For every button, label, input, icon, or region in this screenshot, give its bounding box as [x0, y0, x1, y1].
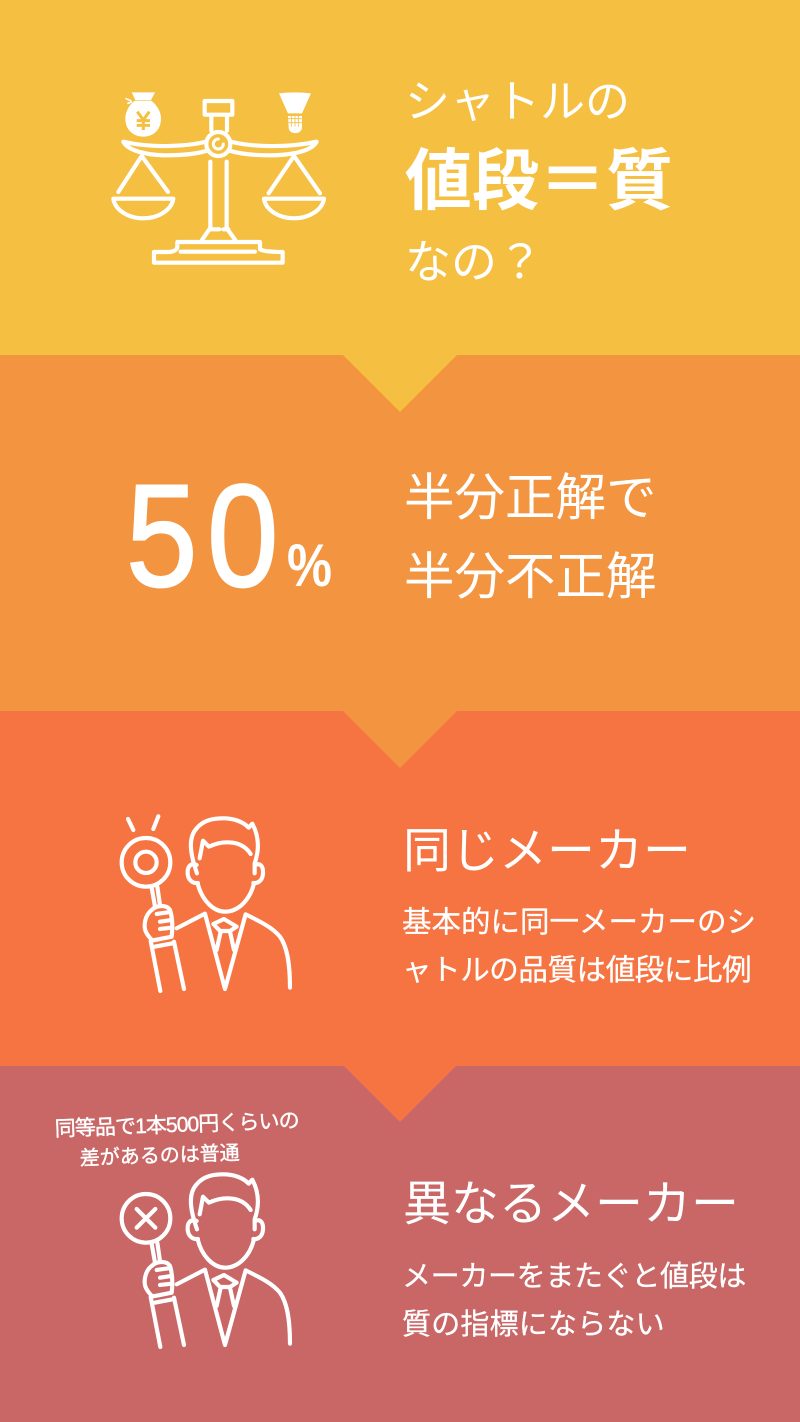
handwritten note: 差があるのは普通	[79, 1141, 240, 1170]
heading: シャトルの: シャトルの	[405, 76, 630, 127]
big number: 50%: 0	[207, 455, 278, 618]
big number: 50%: %	[287, 532, 332, 599]
big number: 50%: 5	[126, 455, 197, 618]
text: メーカーをまたぐと値段は: メーカーをまたぐと値段は	[402, 1261, 746, 1293]
panel: fifty percent	[0, 355, 800, 711]
icon: money bag	[125, 92, 161, 137]
heading: なの？: なの？	[405, 236, 543, 288]
panel: different maker	[0, 1066, 800, 1422]
text: 半分正解で: 半分正解で	[404, 469, 656, 526]
text: 質の指標にならない: 質の指標にならない	[402, 1309, 665, 1341]
heading: 異なるメーカー: 異なるメーカー	[403, 1178, 739, 1231]
text: 基本的に同一メーカーのシ: 基本的に同一メーカーのシ	[402, 906, 756, 939]
big number: 50%	[126, 455, 332, 618]
text: ャトルの品質は値段に比例: ャトルの品質は値段に比例	[402, 954, 751, 987]
heading: 同じメーカー: 同じメーカー	[403, 825, 691, 878]
icon: shuttlecock	[279, 92, 311, 133]
handwritten note: 同等品で1本500円くらいの	[54, 1109, 300, 1141]
icon: balance scale with money bag and shuttlecock	[111, 92, 326, 265]
text: 半分不正解: 半分不正解	[404, 548, 656, 605]
heading: 値段＝質: 値段＝質	[405, 144, 673, 219]
panel: price and quality question	[0, 0, 800, 356]
panel: same maker	[0, 711, 800, 1066]
